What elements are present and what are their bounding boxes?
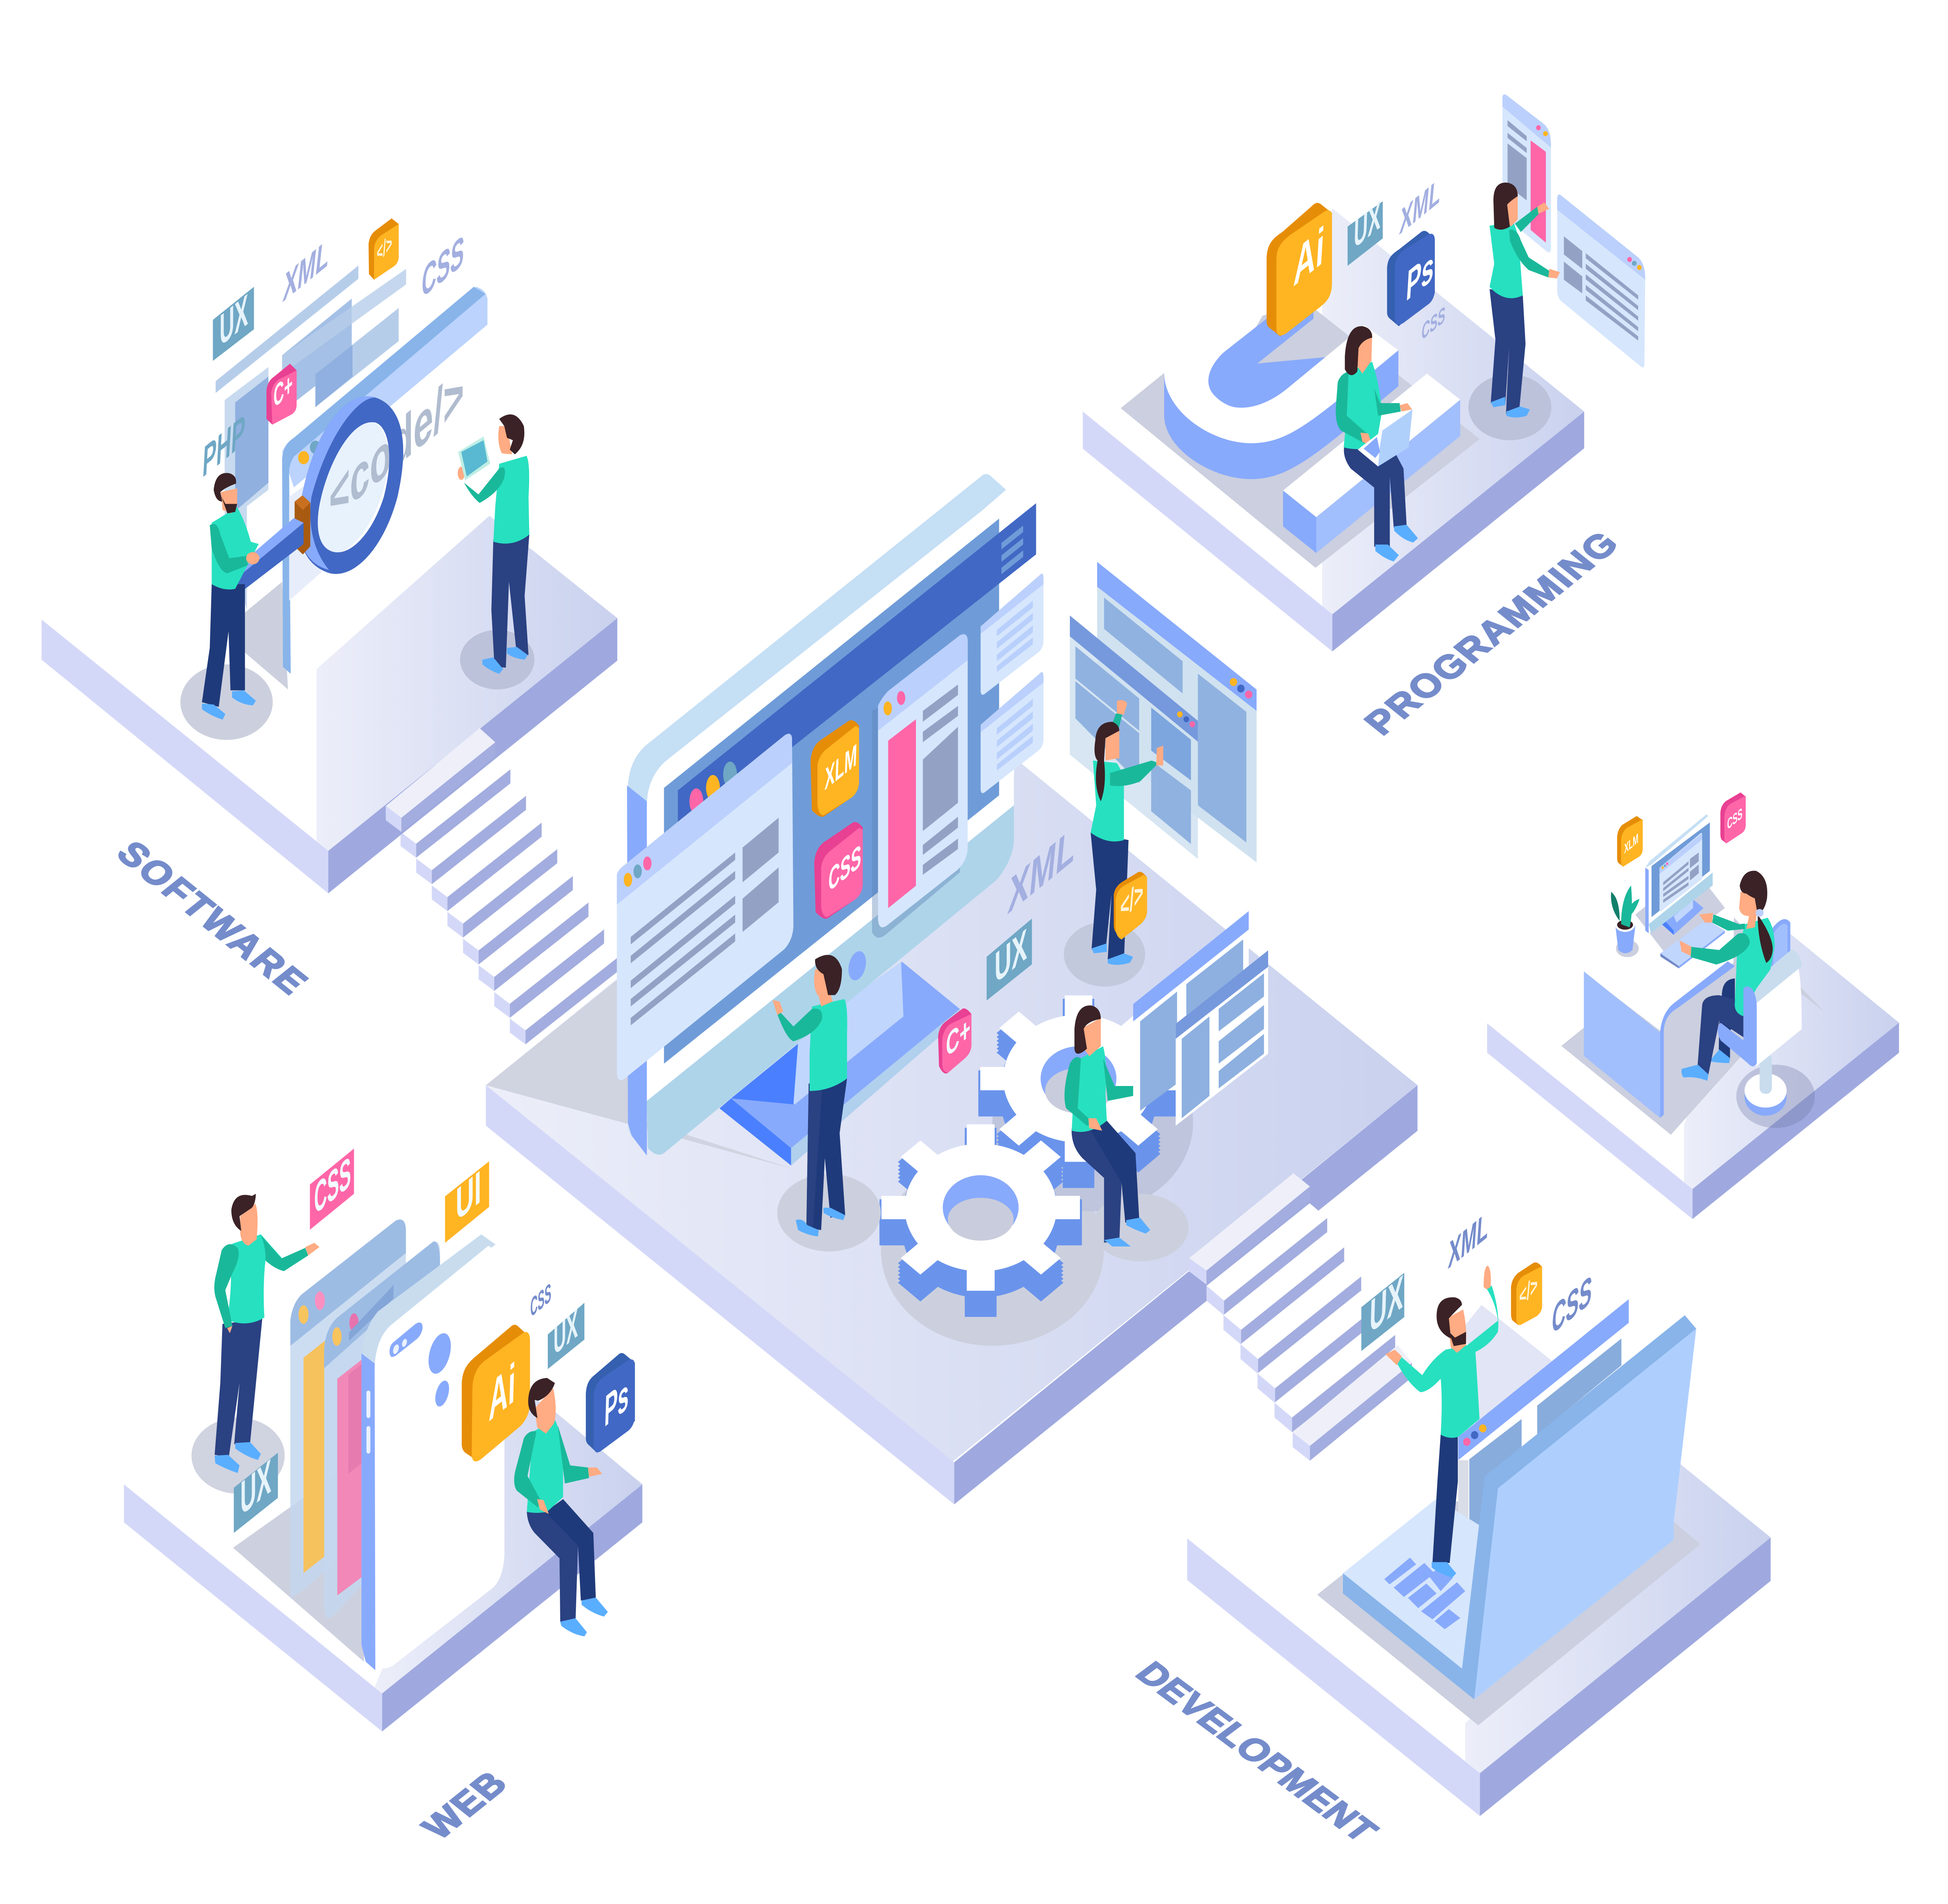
panel: desk platform bbox=[1487, 792, 1899, 1219]
person: standing man pointing bbox=[214, 1194, 319, 1473]
window stack: front bbox=[1070, 615, 1198, 859]
gear: front bbox=[881, 1124, 1080, 1315]
chair bbox=[1745, 919, 1802, 1116]
icon: UX tag right: UX bbox=[554, 1300, 578, 1364]
label: WEB: WEB bbox=[414, 1765, 515, 1846]
magnifier lens bbox=[297, 407, 404, 568]
person: woman at windows bbox=[1064, 700, 1163, 987]
icon: CSS badge bbox=[1720, 792, 1746, 843]
panel: programming platform bbox=[1083, 94, 1645, 651]
icon: UX tag left bbox=[234, 1449, 278, 1533]
gear shadows bbox=[881, 1032, 1193, 1346]
magnifying glass bbox=[226, 396, 403, 595]
window: browser panel bbox=[1557, 194, 1645, 367]
window behind laptop bbox=[1458, 1299, 1629, 1600]
icon: UX tag: UX bbox=[1369, 1264, 1404, 1344]
shadow: right man bbox=[460, 630, 535, 689]
icon: code badge bbox=[1511, 1262, 1542, 1325]
windows layered bbox=[290, 1220, 440, 1618]
label: SOFTWARE: SOFTWARE bbox=[109, 834, 316, 1001]
icon: UX tag left: UX bbox=[240, 1449, 271, 1527]
shadow: seated woman bbox=[1092, 1194, 1189, 1261]
text: XML: XML bbox=[1398, 169, 1443, 243]
icon: plant bbox=[1611, 885, 1639, 957]
icon: UX tag: UX bbox=[995, 919, 1027, 994]
label: PROGRAMMING: PROGRAMMING bbox=[1356, 525, 1626, 742]
stairs: centre to development bbox=[1189, 1173, 1412, 1461]
icon: Ps badge: Ps bbox=[1405, 240, 1436, 311]
label: DEVELOPMENT: DEVELOPMENT bbox=[1128, 1655, 1386, 1848]
icon: Ai badge: Ai bbox=[488, 1350, 516, 1434]
windows beside gears bbox=[1133, 911, 1268, 1126]
icon: CSS badge bbox=[814, 822, 863, 919]
person: standing man at monitor bbox=[773, 955, 881, 1252]
icon: UX tag: UX bbox=[219, 284, 248, 356]
text: code tag: <code/> bbox=[329, 355, 464, 536]
icon: round button bbox=[845, 949, 869, 982]
icon: code badge bbox=[369, 219, 399, 280]
panel: central platform bbox=[486, 707, 1417, 1504]
text: CSS: CSS bbox=[420, 225, 466, 308]
icon: CSS badge: CSS bbox=[1727, 804, 1742, 833]
icon: code badge: </> bbox=[1519, 1270, 1538, 1312]
icon: Ps badge bbox=[586, 1353, 635, 1453]
icon: UI tag bbox=[445, 1160, 489, 1243]
monitor stand bbox=[720, 962, 960, 1165]
icon: Ai badge bbox=[462, 1325, 530, 1461]
icon: CSS badge: CSS bbox=[828, 836, 862, 899]
laptop bbox=[1343, 1315, 1696, 1699]
window: small panel bottom bbox=[981, 672, 1043, 793]
text: CSS: CSS bbox=[1421, 300, 1446, 346]
panel: central scene bbox=[617, 474, 1268, 1261]
icon: C+ badge: C+ bbox=[946, 1008, 970, 1065]
shadow: chair base bbox=[1736, 1065, 1815, 1128]
icon: XLM badge: XLM bbox=[824, 737, 858, 797]
stairs: software to centre bbox=[401, 758, 620, 1044]
shadow: standing man bbox=[192, 1417, 285, 1494]
icon: C+ badge bbox=[938, 1008, 971, 1074]
icon: UX tag right bbox=[548, 1300, 584, 1369]
person: bearded man with magnifier bbox=[202, 473, 259, 719]
person: man with tablet bbox=[458, 414, 529, 674]
icon: Ps badge: Ps bbox=[603, 1368, 630, 1437]
icon: Ai badge: Ai bbox=[1292, 214, 1326, 298]
panel: software platform bbox=[42, 219, 617, 893]
person: seated woman bbox=[1064, 1005, 1150, 1246]
icon: C+ badge: C+ bbox=[273, 365, 293, 414]
desk bbox=[1584, 847, 1735, 1118]
icon: XLM badge bbox=[1617, 816, 1643, 867]
text: CSS small: CSS bbox=[530, 1277, 551, 1324]
panel: web platform bbox=[124, 1146, 642, 1731]
shadow: standing woman bbox=[1468, 374, 1551, 440]
icon: CSS tag: CSS bbox=[314, 1146, 351, 1224]
window: phone screen bbox=[1502, 94, 1551, 252]
text: XML: XML bbox=[1006, 814, 1078, 926]
person: seated man bbox=[514, 1378, 608, 1636]
person: standing woman bbox=[1489, 183, 1560, 418]
text: CSS: CSS bbox=[1551, 1266, 1593, 1344]
window: centre browser bbox=[872, 634, 968, 938]
icon: Ai badge bbox=[1267, 203, 1332, 337]
icon: code badge: </> bbox=[1120, 873, 1143, 926]
icon: code badge: </> bbox=[377, 230, 392, 267]
icon: code badge bbox=[1114, 872, 1147, 940]
text: XML: XML bbox=[281, 229, 332, 312]
window: main browser bbox=[617, 734, 793, 1080]
window: small panel top bbox=[981, 574, 1043, 695]
person: woman at desk bbox=[1680, 871, 1775, 1081]
icon: Ps badge bbox=[1387, 231, 1436, 326]
icon: UX tag bbox=[986, 919, 1032, 1001]
code window bbox=[215, 266, 487, 674]
bench bbox=[1283, 374, 1460, 553]
icon: C+ badge bbox=[266, 364, 296, 425]
shadow: left man bbox=[180, 665, 273, 740]
curved seat bbox=[1164, 302, 1398, 479]
phone bbox=[362, 1234, 505, 1670]
monitor bbox=[1645, 814, 1713, 935]
person: bearded man arms raised bbox=[1385, 1266, 1498, 1578]
person: seated woman with laptop bbox=[1336, 326, 1418, 561]
window stack: back bbox=[1097, 562, 1256, 862]
gear: back bbox=[980, 995, 1177, 1186]
text: XML: XML bbox=[1447, 1202, 1490, 1278]
icon: XLM badge bbox=[810, 720, 859, 817]
keyboard bbox=[1660, 919, 1725, 968]
monitor bbox=[627, 474, 1036, 1156]
icon: XLM badge: XLM bbox=[1624, 831, 1638, 857]
panel: development platform bbox=[1187, 1202, 1771, 1816]
icon: UX tag: UX bbox=[1353, 192, 1382, 257]
text: PHP: PHP bbox=[201, 404, 247, 487]
icon: UI tag: UI bbox=[456, 1160, 481, 1232]
icon: UX tag bbox=[213, 284, 254, 361]
